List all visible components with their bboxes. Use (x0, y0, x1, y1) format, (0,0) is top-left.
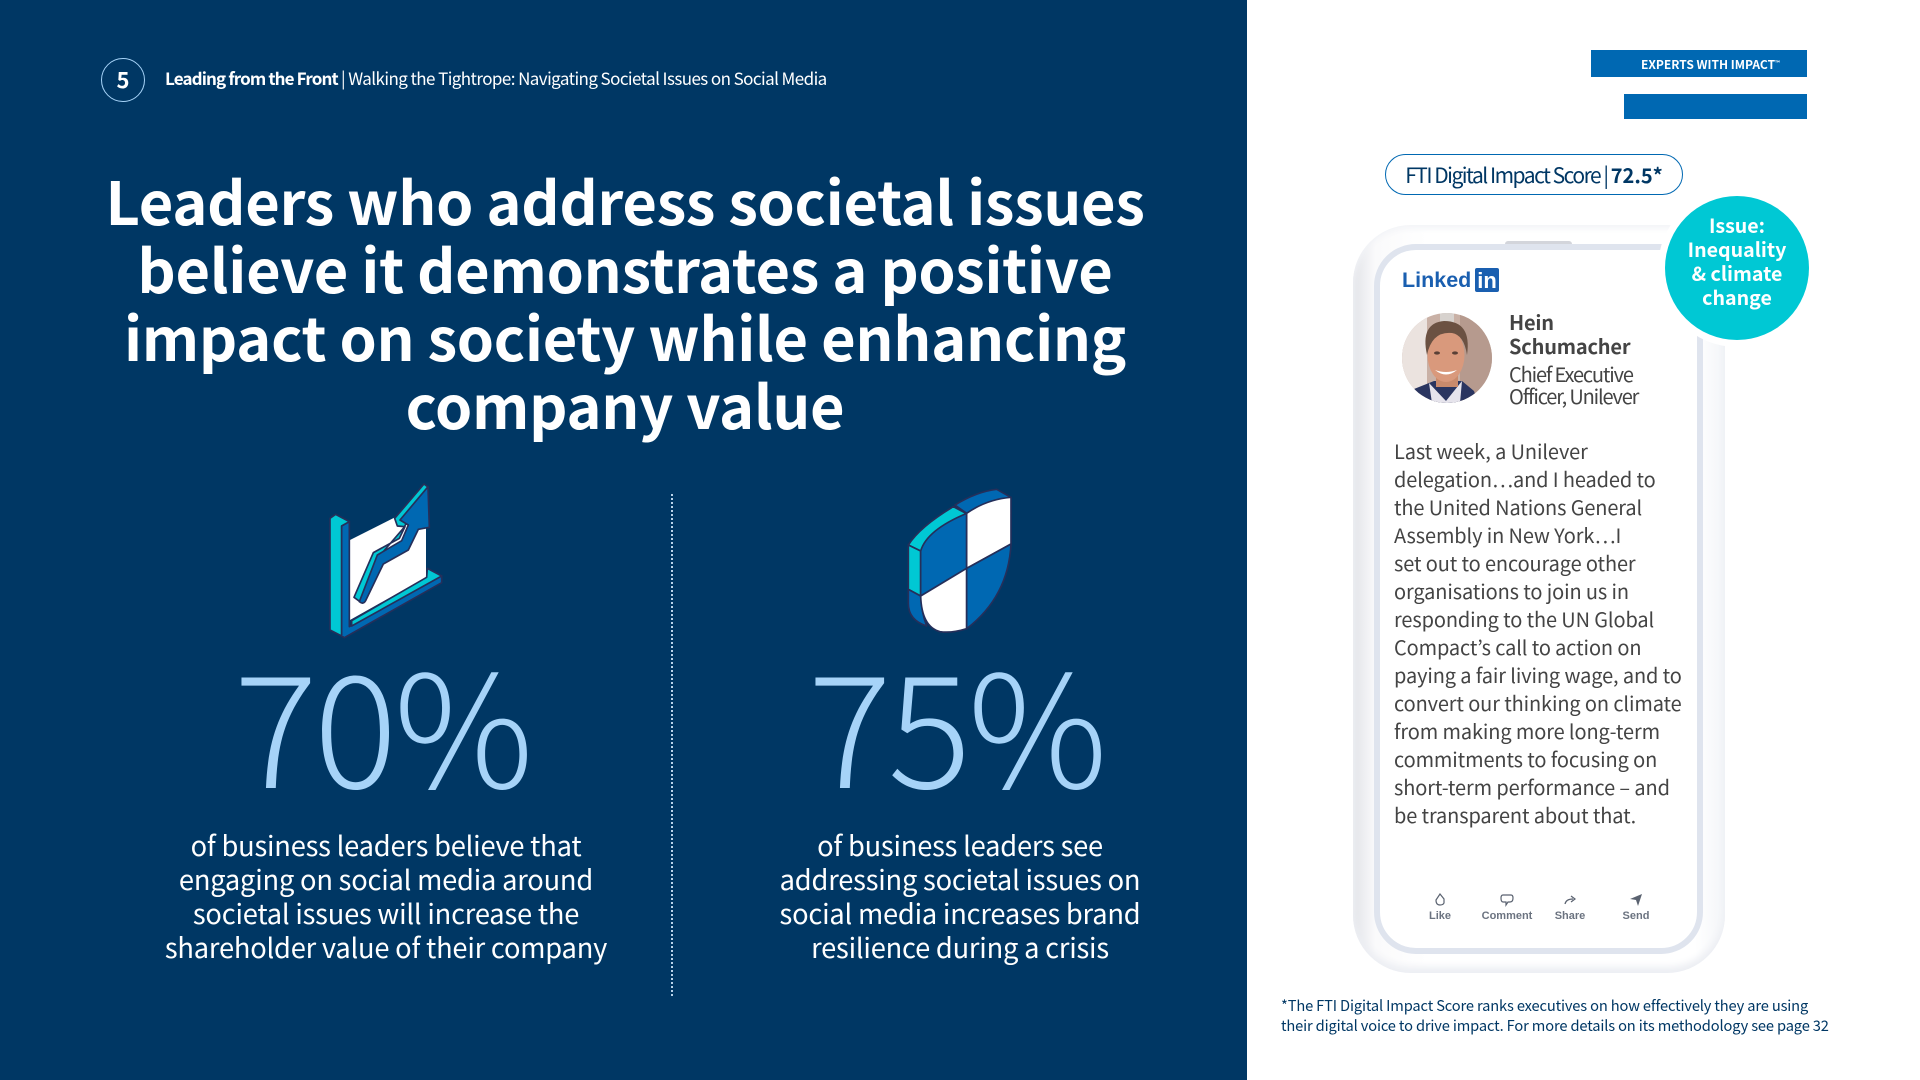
issue callout circle: & climate (1692, 258, 1782, 287)
post actions bar (1435, 893, 1642, 907)
linkedin post text: paying a fair living wage, and to (1394, 660, 1682, 689)
linkedin wordmark: Linked (1402, 268, 1471, 292)
icon: like (1435, 893, 1445, 906)
linkedin in box: in (1477, 268, 1497, 293)
linkedin post text: from making more long-term (1394, 716, 1660, 745)
text: 75% description: social media increases brand (780, 892, 1140, 932)
statistic: 75%: 75% (808, 607, 1104, 833)
text: 70% description: shareholder value of their company (165, 926, 607, 966)
icon: send (1630, 894, 1642, 906)
linkedin post text: Assembly in New York…I (1394, 520, 1621, 549)
header breadcrumb: Leading from the Front | Walking the Tightrope: Navigating Societal Issues on Social Media (165, 65, 827, 90)
issue callout circle: change (1702, 282, 1772, 311)
score pill (1385, 154, 1683, 195)
linkedin post text: the United Nations General (1394, 492, 1642, 521)
issue callout circle: Issue: (1709, 210, 1765, 239)
executive name (1509, 307, 1631, 360)
phone mockup (1353, 225, 1725, 973)
main title: Leaders who address societal issues (105, 157, 1145, 243)
main title: impact on society while enhancing (124, 293, 1126, 379)
linkedin post text: Last week, a Unilever (1394, 436, 1588, 465)
linkedin post text: be transparent about that. (1394, 800, 1636, 829)
text: 75% description: addressing societal issues on (780, 858, 1140, 898)
label bar: experts with impact (1591, 50, 1807, 77)
action label: share: Share (1555, 910, 1585, 922)
executive name: Schumacher (1509, 331, 1630, 360)
text: 70% description: of business leaders believe that (191, 824, 581, 864)
linkedin post text: set out to encourage other (1394, 548, 1636, 577)
linkedin post text: convert our thinking on climate (1394, 688, 1682, 717)
dotted column divider (671, 494, 673, 996)
footnote: their digital voice to drive impact. For more details on its methodology see page 32 (1281, 1015, 1829, 1036)
footnote (1281, 995, 1829, 1036)
icon: share (1564, 896, 1576, 904)
action label: like: Like (1429, 910, 1451, 922)
text: 75% description: of business leaders see (817, 824, 1103, 864)
text: 70% description: engaging on social media around (179, 858, 593, 898)
text: 70% description: societal issues will increase the (193, 892, 579, 932)
issue callout circle: Inequality (1688, 234, 1786, 263)
linkedin post text: organisations to join us in (1394, 576, 1629, 605)
portrait photo (1402, 313, 1492, 403)
statistic: 70%: 70% (234, 607, 530, 833)
section number badge: 5 (116, 63, 129, 95)
text: 70% description (165, 824, 607, 966)
phone speaker notch (1505, 241, 1572, 245)
action label: comment: Comment (1482, 910, 1532, 922)
action label: send: Send (1623, 910, 1649, 922)
phone screen (1374, 244, 1703, 954)
linkedin post text: delegation…and I headed to (1394, 464, 1656, 493)
footnote: *The FTI Digital Impact Score ranks executives on how effectively they are using (1281, 995, 1808, 1016)
linkedin post text: commitments to focusing on (1394, 744, 1657, 773)
linkedin post text: Compact’s call to action on (1394, 632, 1641, 661)
linkedin post text: short-term performance – and (1394, 772, 1670, 801)
main title (105, 157, 1145, 447)
linkedin post text (1394, 436, 1682, 829)
executive role: Chief Executive (1509, 359, 1633, 388)
label bar: experts with impact: EXPERTS WITH IMPACT™ (1641, 56, 1780, 73)
executive name: Hein (1509, 307, 1554, 336)
icon: shield (908, 488, 1012, 633)
issue callout circle (1665, 196, 1809, 340)
icon: rising chart (329, 483, 442, 638)
text: 75% description: resilience during a crisis (811, 926, 1109, 966)
text: 75% description (780, 824, 1140, 966)
main title: believe it demonstrates a positive (137, 225, 1113, 311)
linkedin post text: responding to the UN Global (1394, 604, 1654, 633)
executive role (1509, 359, 1640, 410)
executive role: Officer, Unilever (1509, 381, 1638, 410)
score pill: FTI Digital Impact Score | 72.5* (1405, 160, 1663, 190)
blank blue bar (1624, 94, 1807, 119)
main title: company value (406, 361, 844, 447)
icon: comment (1500, 894, 1514, 907)
linkedin logo (1402, 268, 1499, 293)
panel: left navy background (0, 0, 1247, 1080)
section number badge (101, 58, 145, 102)
